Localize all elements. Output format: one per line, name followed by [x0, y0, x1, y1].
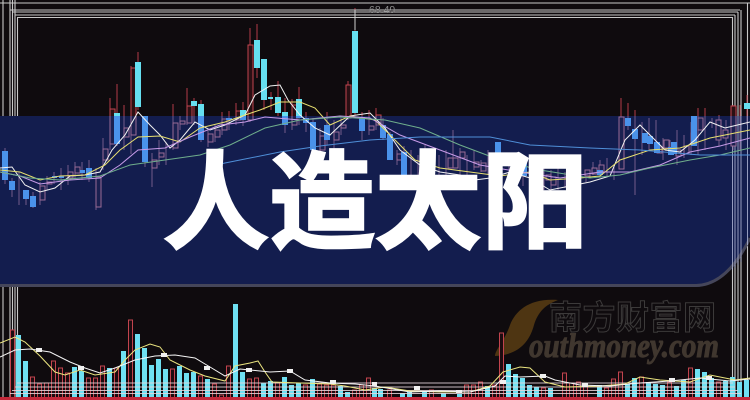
watermark: southmoney — [495, 299, 719, 365]
volume bars — [0, 304, 750, 400]
red volume bars — [10, 320, 720, 398]
volume average line: yellow — [0, 337, 750, 392]
peak price label: 68.49 — [369, 4, 395, 16]
watermark chinese name: 南方财富网 — [549, 299, 716, 336]
cyan volume bars — [16, 304, 749, 398]
volume average line: white — [0, 349, 750, 392]
icon: watermark swoosh — [495, 300, 558, 356]
bottom red strip — [0, 397, 750, 400]
navy band — [0, 116, 750, 287]
volume line markers — [36, 348, 712, 393]
bottom frame lines — [10, 383, 741, 394]
watermark latin name: outhmoney.com — [529, 328, 719, 365]
peak price label — [355, 4, 395, 30]
title: 人造太阳 — [163, 145, 588, 263]
candlestick chart — [0, 8, 750, 210]
